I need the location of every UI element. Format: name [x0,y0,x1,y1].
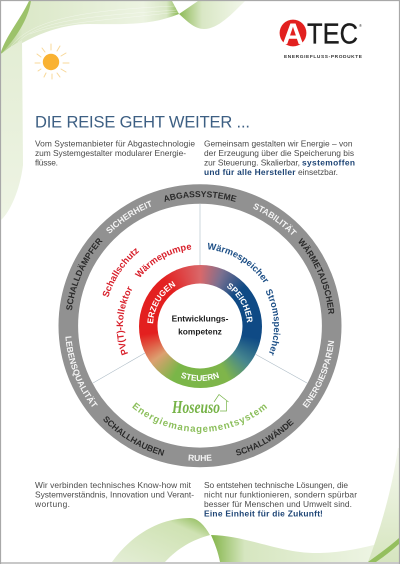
segment: speichern products [208,242,280,356]
segment: erzeugen products [102,244,192,356]
text block: closing left [34,480,194,509]
text block: closing right: So entstehen technische Lösungen, die [204,480,348,490]
outer ring labels: RUHE [188,454,212,461]
center text: kompetenz [178,326,222,336]
text block: intro right [204,138,355,177]
text block: intro right: zur Steuerung. Skalierbar, [204,158,300,168]
text block: intro right: der Erzeugung über die Speicherung bis [204,148,354,158]
segment: erzeugen products: PV(T)-Kollektor [116,286,132,356]
text block: intro right: und für alle Hersteller [204,167,296,177]
text block: closing right: ! [320,508,323,518]
ribbon: bottom centre wave [112,518,210,562]
outer ring labels: ABGASSYSTEME [164,191,236,202]
outer ring labels: SCHALLDÄMPFER [66,238,103,310]
text block: intro left [35,138,195,168]
outer ring labels: SCHALLHAUBEN [104,416,164,456]
inner ring labels [147,281,252,382]
segment: speichern products: Stromspeicher [266,289,280,356]
text block: closing right: Eine Einheit für die Zukunft [204,508,320,518]
segment: speichern products: Wärmespeicher [208,242,268,282]
outer ring labels: STABILITÄT [253,204,297,235]
outer ring [68,194,332,457]
text block: closing left: wortung. [34,499,70,509]
logo: ATEC: TEC [307,18,358,50]
logo: ATEC [280,18,363,60]
outer ring labels [65,191,334,461]
text block: closing right: nicht nur funktionieren, sondern spürbar [204,490,357,500]
text block: intro left: Vom Systemanbieter für Abgastechnologie [35,138,195,148]
center text: Entwicklungs- [172,314,229,324]
inner ring labels: SPEICHER [227,283,252,323]
text block: closing left: Systemverständnis, Innovation und Verant- [35,490,194,500]
text block: closing right [204,480,357,518]
text block: intro right: Gemeinsam gestalten wir Energie – von [204,138,353,148]
text block: intro left: zum Systemgestalter modularer Energie- [35,148,186,158]
outer ring labels: LEBENSQUALITÄT [65,336,98,407]
divider lines [93,204,307,383]
inner ring labels: STEUERN [181,372,220,382]
outer ring labels: SCHALLWÄNDE [236,419,294,456]
inner ring labels: ERZEUGEN [147,281,176,324]
ribbon: top left wave [1,1,179,56]
outer ring labels: WÄRMETAUSCHER [298,238,334,314]
inner ring hole [158,284,242,368]
ribbon: left edge wave [1,40,23,220]
logo: Hoseuso: Hoseuso [171,397,220,417]
segment: steuern products: Energiemanagementsystem [132,402,268,434]
center text [172,314,229,336]
ribbon: right edge wave [368,448,399,562]
outer ring labels: SICHERHEIT [106,200,151,234]
logo: ATEC: ® [359,23,362,28]
ribbon: top centre wave [179,1,245,29]
text block: closing right: besser für Menschen und Umwelt sind. [204,499,352,509]
title: DIE REISE GEHT WEITER ... [35,114,250,132]
text block: intro right: einsetzbar. [298,167,338,177]
text block: closing left: Wir verbinden technisches Know-how mit [35,480,192,490]
outer ring labels: ENERGIESPAREN [302,340,334,408]
text block: intro right: systemoffen [302,158,355,168]
ribbon: bottom right wave [211,535,399,562]
inner colour ring gradient [138,264,262,388]
segment: erzeugen products: Schallschutz [102,248,140,297]
logo: ATEC: A [282,18,304,51]
segment: erzeugen products: Wärmepumpe [134,244,192,278]
icon: sun [35,44,69,79]
text block: intro left: flüsse. [35,158,58,168]
logo: ATEC: ENERGIEFLUSS-PRODUKTE [284,54,363,60]
